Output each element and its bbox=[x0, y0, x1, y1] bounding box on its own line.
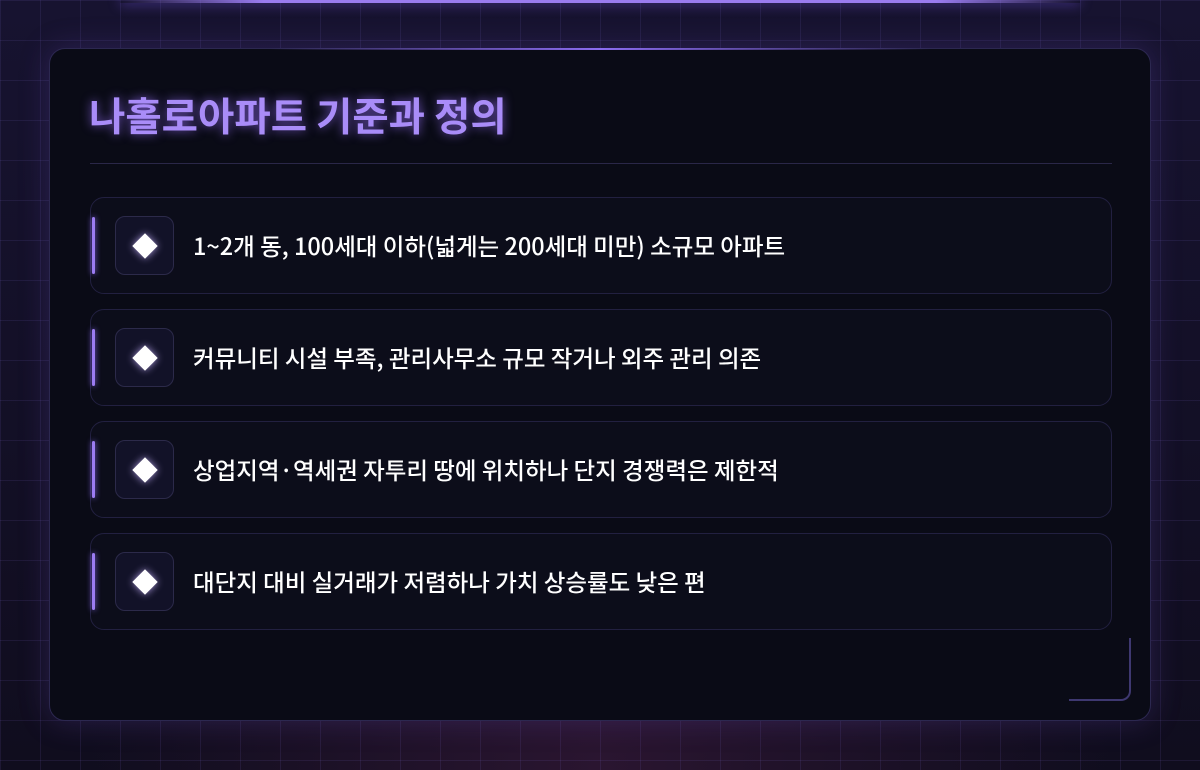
text 3: 상업지역·역세권 자투리 땅에 위치하나 단지 경쟁력은 제한적 bbox=[193, 452, 779, 486]
item 1 bbox=[90, 197, 1112, 294]
item 4 bbox=[90, 533, 1112, 630]
icon: diamond bbox=[115, 216, 174, 275]
item 3 bbox=[90, 421, 1112, 518]
title: 나홀로아파트 기준과 정의 bbox=[89, 86, 507, 143]
icon: diamond bbox=[115, 440, 174, 499]
icon: diamond bbox=[115, 552, 174, 611]
icon: diamond bbox=[115, 328, 174, 387]
item 2 bbox=[90, 309, 1112, 406]
text 1: 1~2개 동, 100세대 이하(넓게는 200세대 미만) 소규모 아파트 bbox=[193, 228, 785, 262]
corner decoration bbox=[1069, 638, 1131, 701]
text 4: 대단지 대비 실거래가 저렴하나 가치 상승률도 낮은 편 bbox=[193, 564, 706, 598]
text 2: 커뮤니티 시설 부족, 관리사무소 규모 작거나 외주 관리 의존 bbox=[193, 340, 761, 374]
